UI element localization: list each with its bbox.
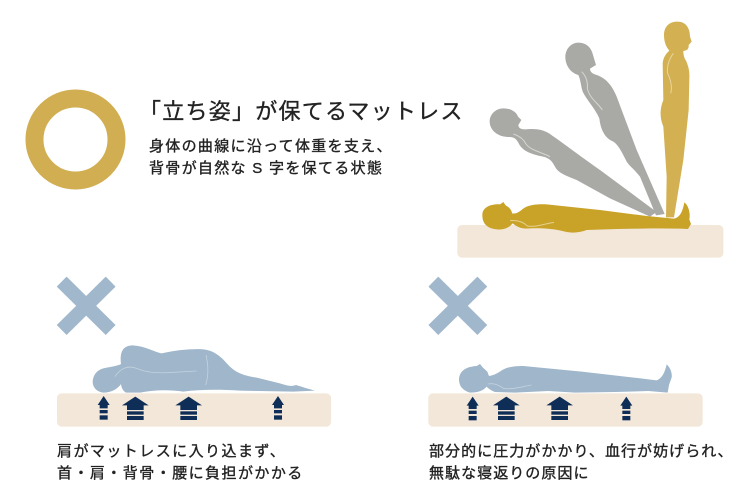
figure: leaning grey near xyxy=(565,43,665,215)
text block: correct posture description xyxy=(149,138,393,176)
text block: correct posture description: 身体の曲線に沿って体重を支え、 xyxy=(149,138,393,155)
icon: gold circle xyxy=(34,98,116,180)
panel: bad posture right illustration xyxy=(428,282,703,427)
text block: left caption: 首・肩・背骨・腰に負担がかかる xyxy=(57,464,304,482)
figure: flat sleeper xyxy=(459,364,672,393)
mattress: right xyxy=(428,393,703,427)
mattress: correct xyxy=(457,225,723,258)
arrows: pressure left xyxy=(98,396,284,420)
title: 「立ち姿」が保てるマットレス xyxy=(139,99,464,124)
mattress: left xyxy=(57,393,331,427)
text block: right caption xyxy=(429,443,734,482)
text block: right caption: 無駄な寝返りの原因に xyxy=(429,464,590,482)
panel: correct posture illustration xyxy=(457,22,723,258)
figure: leaning grey far xyxy=(490,108,657,217)
figure: side sleeper xyxy=(93,345,315,393)
arrows: pressure right xyxy=(467,397,632,420)
text block: right caption: 部分的に圧力がかかり、血行が妨げられ、 xyxy=(429,443,734,460)
text block: correct posture description: 背骨が自然な S 字を保てる状態 xyxy=(149,160,383,176)
icon: cross right xyxy=(433,282,482,330)
text block: left caption xyxy=(57,443,304,482)
text block: left caption: 肩がマットレスに入り込まず、 xyxy=(57,443,286,460)
panel: bad posture left illustration xyxy=(57,282,331,427)
figure: standing gold xyxy=(661,22,692,217)
figure: lying gold xyxy=(482,202,691,233)
icon: cross left xyxy=(62,282,111,330)
